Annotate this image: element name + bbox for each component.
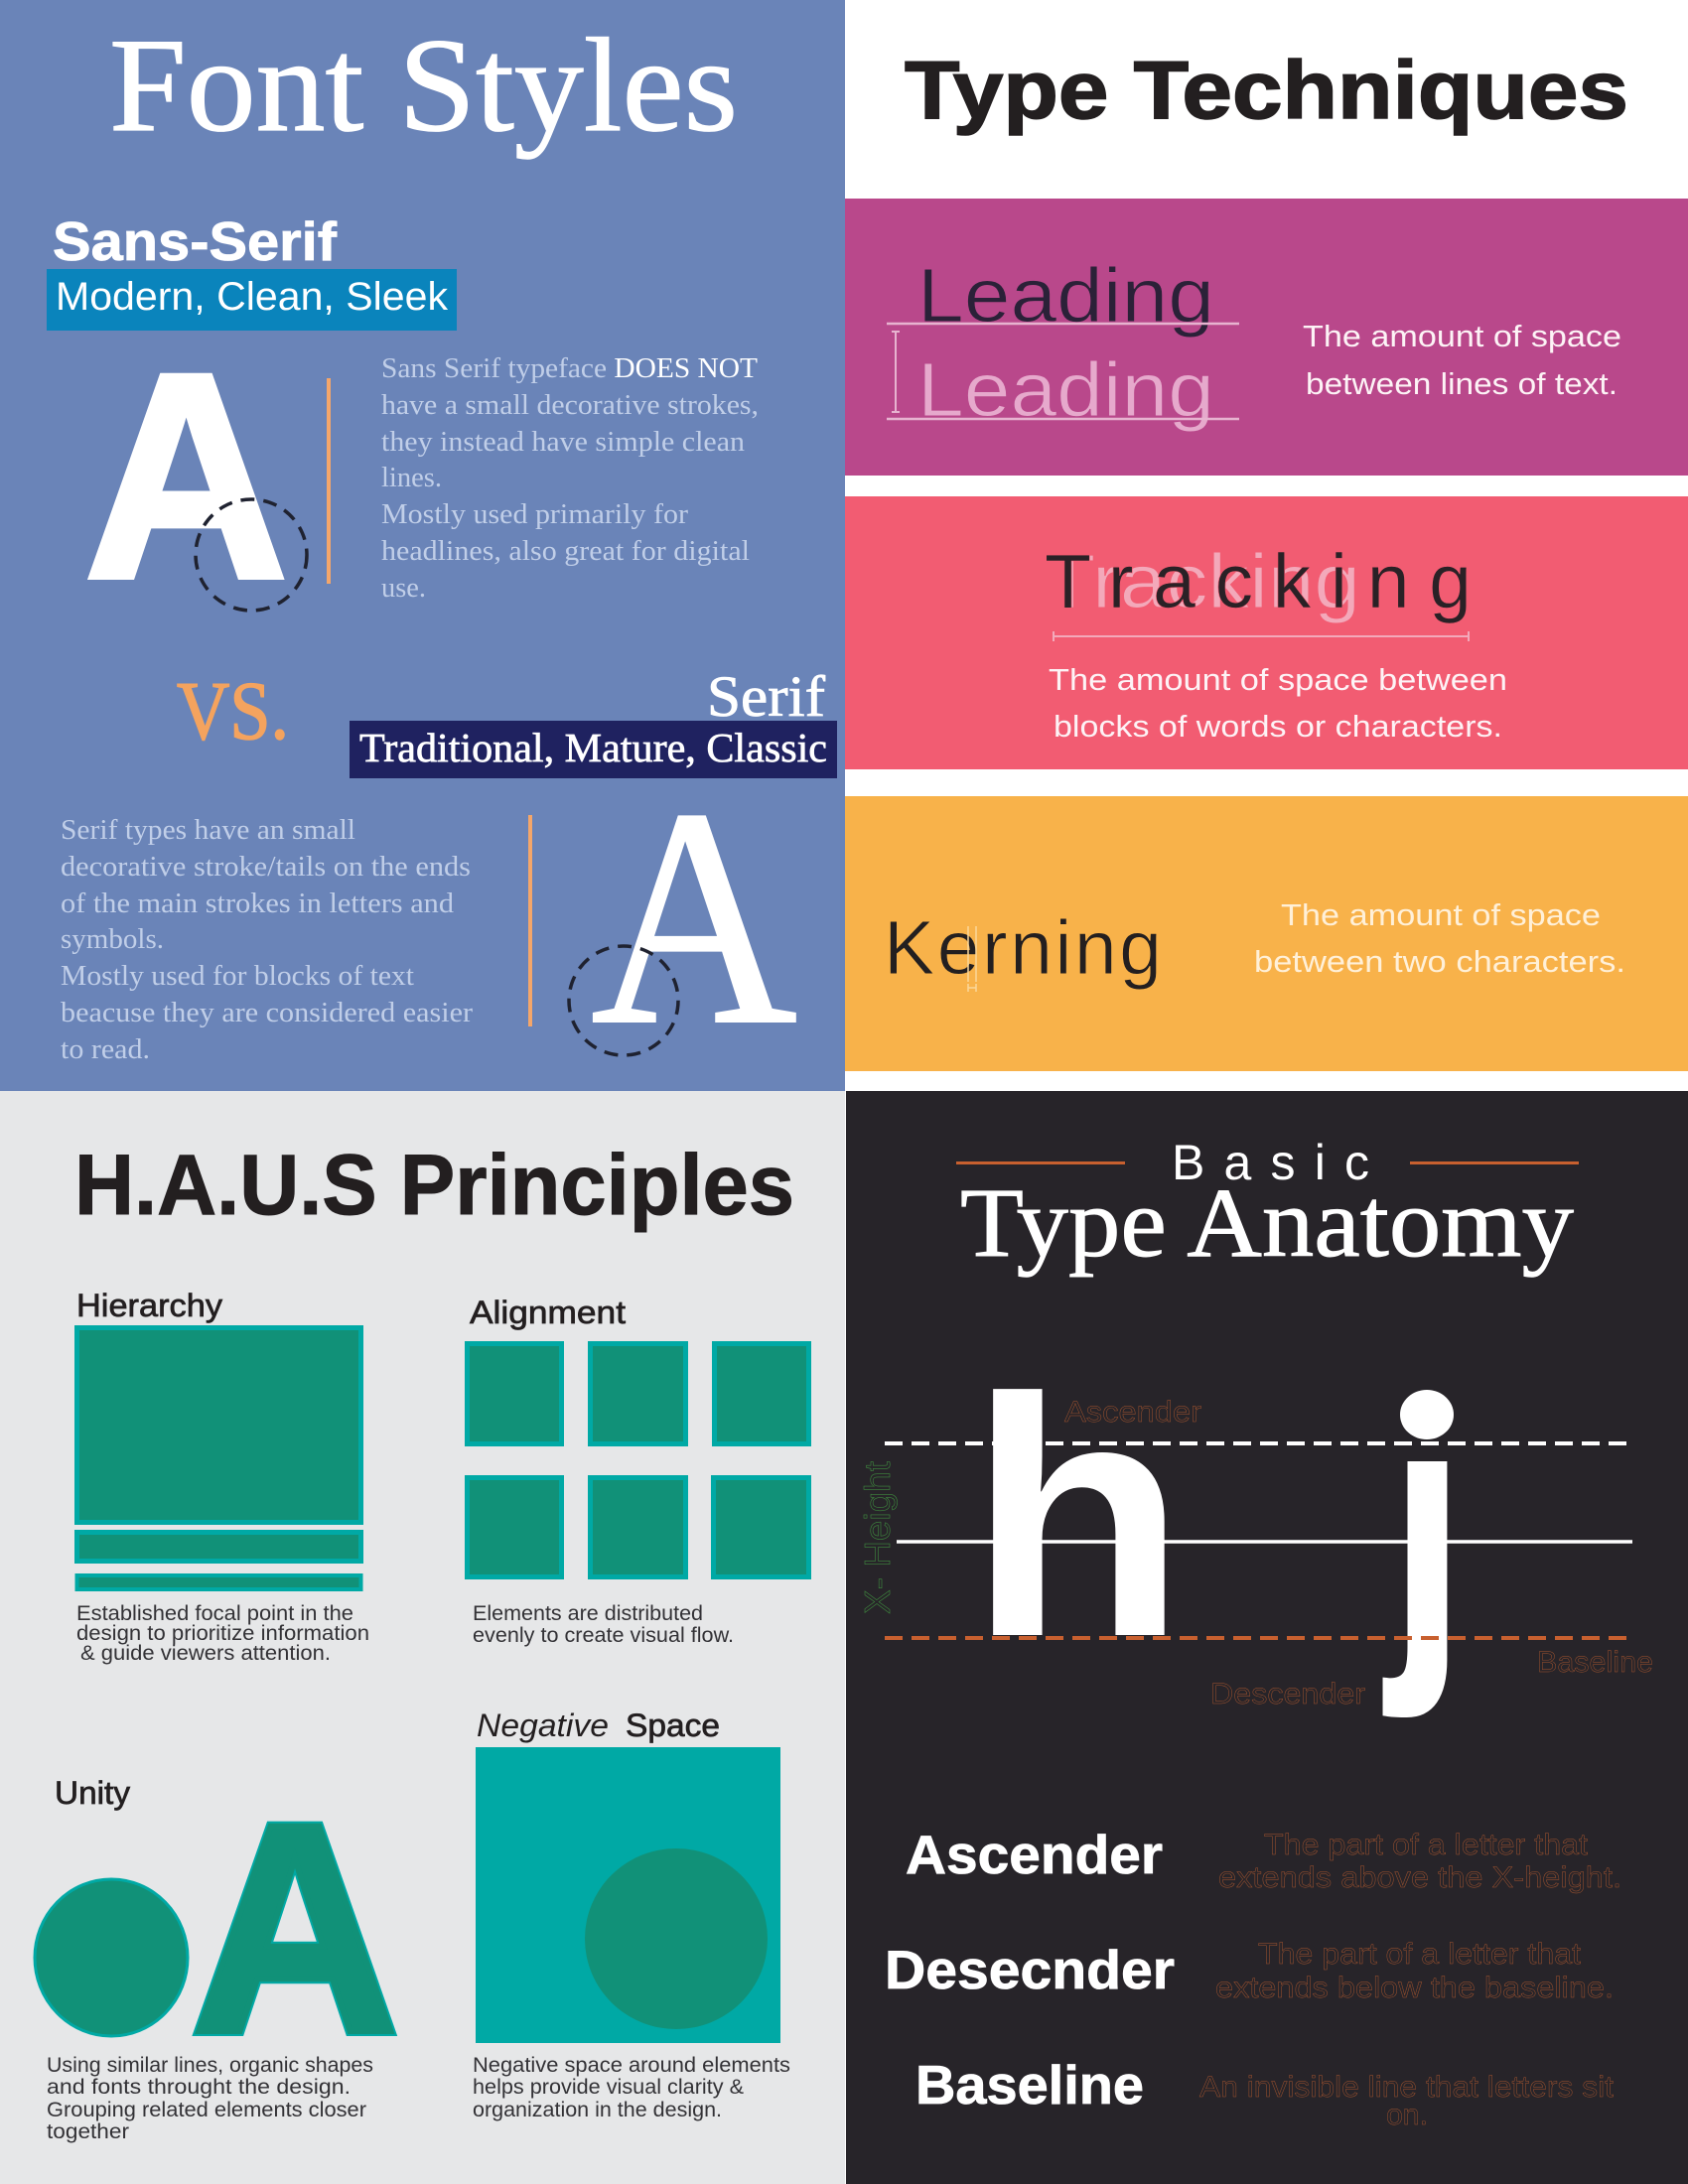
heading: Unity: Unity — [55, 1775, 130, 1811]
title: Basic Type Anatomy: Type Anatomy — [960, 1167, 1574, 1278]
diagram: circle and letter A: A — [192, 1761, 398, 2095]
heading: Alignment: Alignment — [470, 1295, 626, 1330]
text: negative space description: organization in the design. — [473, 2099, 722, 2121]
definition: Baseline: on. — [1386, 2099, 1428, 2131]
definition: Baseline — [915, 2054, 1615, 2131]
sample: tracking word comparison: Tracking — [1045, 539, 1472, 624]
definition: Ascender: The part of a letter that — [1264, 1829, 1589, 1861]
text block: sans-serif description: Mostly used primarily for — [381, 499, 689, 530]
title: Font Styles: Font Styles — [109, 12, 738, 160]
text: unity description — [47, 2054, 373, 2143]
text: negative space description — [473, 2054, 790, 2121]
heading: Hierarchy: Hierarchy — [76, 1288, 222, 1323]
text: leading description: between lines of text. — [1306, 366, 1618, 401]
sample: kerning word with marker: Kerning — [884, 905, 1162, 991]
band: tracking — [845, 496, 1688, 769]
label: X-Height: X- Height — [857, 1461, 898, 1614]
diagram: h and j letter anatomy — [864, 1389, 1652, 1717]
title: Type Techniques: Type Techniques — [905, 44, 1628, 136]
definition: Desecnder: extends below the baseline. — [1215, 1972, 1614, 2004]
diagram: circle and letter A — [35, 1761, 398, 2095]
diagram: hierarchy rectangles — [77, 1328, 361, 1589]
text block: sans-serif description: have a small decorative strokes, — [381, 390, 759, 421]
text: unity description: and fonts throught the design. — [47, 2076, 351, 2099]
label band: Traditional, Mature, Classic: Traditional, Mature, Classic — [359, 725, 827, 770]
text: negative space description: Negative space around elements — [473, 2054, 790, 2077]
text: alignment description — [473, 1602, 734, 1647]
sample: leading lines of text: Leading — [917, 347, 1214, 433]
definition: Desecnder — [885, 1938, 1614, 2004]
definition: Desecnder: The part of a letter that — [1258, 1938, 1582, 1971]
text block: serif description: symbols. — [61, 924, 164, 955]
panel: H.A.U.S principles — [0, 1091, 845, 2184]
sample: tracking word comparison: Tracking — [1045, 539, 1360, 624]
definition: Ascender — [906, 1824, 1621, 1894]
text: leading description — [1303, 319, 1621, 401]
text: kerning description — [1254, 897, 1625, 979]
text block: sans-serif description: lines. — [381, 463, 442, 493]
definition: Desecnder: Desecnder — [885, 1939, 1175, 2000]
section: negative space — [473, 1707, 790, 2121]
section: hierarchy — [76, 1288, 369, 1665]
text: alignment description: Elements are distributed — [473, 1602, 703, 1625]
text: hierarchy description: Established focal point in the — [76, 1602, 353, 1625]
text block: serif description: Serif types have an small — [61, 815, 355, 846]
heading: Negative Space: Space — [626, 1707, 720, 1743]
text block: serif description: of the main strokes in letters and — [61, 888, 454, 919]
text: unity description: Grouping related elements closer — [47, 2099, 366, 2121]
letter h: h — [968, 1328, 1187, 1707]
band: kerning — [845, 796, 1688, 1071]
text block: sans-serif description: Sans Serif typeface DOES NOT — [381, 353, 758, 384]
text: hierarchy description — [76, 1602, 369, 1665]
section: unity — [35, 1761, 398, 2143]
text: alignment description: evenly to create visual flow. — [473, 1624, 734, 1647]
text block: sans-serif description: headlines, also great for digital — [381, 536, 750, 567]
text: leading description: The amount of space — [1303, 319, 1621, 353]
sample: leading lines of text — [887, 253, 1239, 433]
text: tracking description: The amount of space between — [1049, 662, 1507, 697]
heading: Negative Space: Negative — [477, 1707, 609, 1743]
heading: Sans-Serif: Sans-Serif — [53, 210, 338, 272]
heading: Negative Space — [477, 1707, 720, 1743]
text block: serif description: to read. — [61, 1034, 150, 1065]
label: Descender: Descender — [1210, 1678, 1365, 1710]
text block: sans-serif description: they instead have simple clean — [381, 427, 745, 458]
icon: sans-serif letter A with dashed circle: A — [84, 314, 288, 639]
icon: serif letter A with dashed circle: A — [591, 745, 797, 1089]
text: unity description: together — [47, 2120, 129, 2143]
panel: basic type anatomy — [846, 1091, 1688, 2184]
text: unity description: Using similar lines, organic shapes — [47, 2054, 373, 2077]
diagram: square with circle — [476, 1747, 780, 2043]
label: Baseline: Baseline — [1537, 1646, 1653, 1679]
diagram: circle and letter A: A — [192, 1761, 398, 2095]
text block: serif description — [61, 815, 474, 1065]
text: negative space description: helps provide visual clarity & — [473, 2076, 744, 2099]
letter j — [1382, 1390, 1454, 1717]
text block: serif description: Mostly used for blocks of text — [61, 961, 414, 992]
band: leading — [845, 199, 1688, 476]
text: hierarchy description: design to prioritize information — [76, 1622, 369, 1645]
section: alignment — [467, 1295, 808, 1647]
definition: Ascender: extends above the X-height. — [1218, 1861, 1621, 1894]
definition: Baseline: An invisible line that letters sit — [1199, 2071, 1615, 2104]
text: kerning description: The amount of space — [1281, 897, 1601, 932]
title: H.A.U.S Principles: H.A.U.S Principles — [74, 1138, 794, 1233]
definition: Baseline: Baseline — [915, 2054, 1144, 2116]
text block: sans-serif description: use. — [381, 573, 426, 604]
text: kerning description: between two characters. — [1254, 944, 1625, 979]
title: Basic Type Anatomy: Basic — [1172, 1135, 1369, 1190]
text: tracking description: blocks of words or characters. — [1054, 709, 1502, 744]
sample: leading lines of text: Leading — [917, 253, 1214, 339]
text: tracking description — [1049, 662, 1507, 744]
label band: Modern, Clean, Sleek: Modern, Clean, Sleek — [56, 275, 449, 319]
letter j: j — [1383, 1276, 1468, 1722]
panel: font styles — [0, 0, 845, 1091]
heading: Serif: Serif — [707, 664, 826, 729]
diagram: alignment grid — [467, 1344, 808, 1576]
text: VS.: VS. — [177, 665, 289, 757]
text block: sans-serif description — [381, 353, 759, 604]
panel: type techniques — [845, 0, 1688, 1091]
label: Ascender: Ascender — [1064, 1396, 1201, 1429]
definition: Ascender: Ascender — [906, 1824, 1163, 1885]
text block: serif description: beacuse they are considered easier — [61, 998, 474, 1028]
label band: Modern, Clean, Sleek — [47, 269, 457, 331]
text block: serif description: decorative stroke/tails on the ends — [61, 852, 471, 883]
text: hierarchy description: & guide viewers attention. — [80, 1642, 331, 1665]
